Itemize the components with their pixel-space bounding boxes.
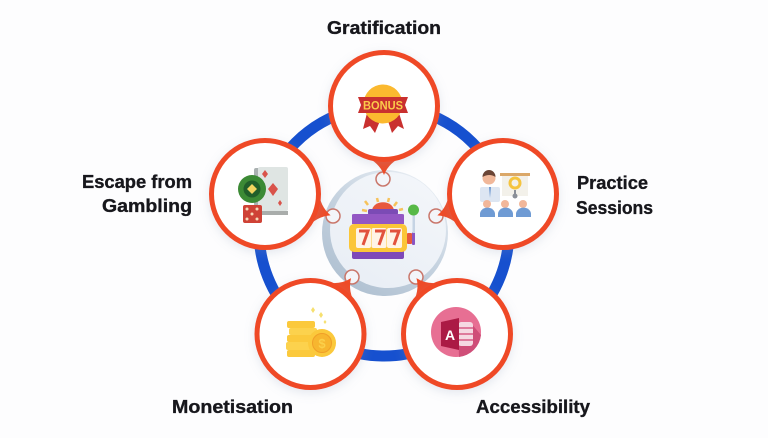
heading: Practice Sessions: [576, 173, 653, 218]
heading: Accessibility: Accessibility: [476, 397, 590, 417]
panel: practice sessions: [431, 140, 556, 248]
panel: monetisation: [257, 266, 367, 388]
connector dot: bottom left: [345, 270, 359, 284]
panel: gratification: [330, 52, 438, 175]
heading: Practice Sessions: Practice: [577, 173, 648, 193]
connector dot: left: [326, 209, 340, 223]
panel: escape from gambling: [212, 140, 337, 248]
heading: Gratification: Gratification: [327, 18, 441, 38]
icon: presenter and audience: [480, 170, 531, 217]
icon: database app logo: A: [445, 327, 455, 343]
connector dot: right: [429, 209, 443, 223]
connector dot: bottom right: [409, 270, 423, 284]
heading: Practice Sessions: Sessions: [576, 198, 653, 218]
central hub disc: [322, 170, 448, 296]
blue ring: [259, 106, 509, 356]
panel: accessibility: [400, 266, 510, 388]
connector dot: top: [376, 172, 390, 186]
heading: Escape from Gambling: [82, 172, 192, 216]
heading: Monetisation: Monetisation: [172, 397, 293, 417]
icon: slot machine: [349, 198, 419, 259]
heading: Escape from Gambling: Escape from: [82, 172, 192, 192]
icon: gold coins: $: [318, 336, 326, 351]
heading: Escape from Gambling: Gambling: [102, 196, 192, 216]
icon: bonus badge: BONUS: [363, 98, 403, 112]
icon: cards, chip and dice: [238, 167, 288, 223]
